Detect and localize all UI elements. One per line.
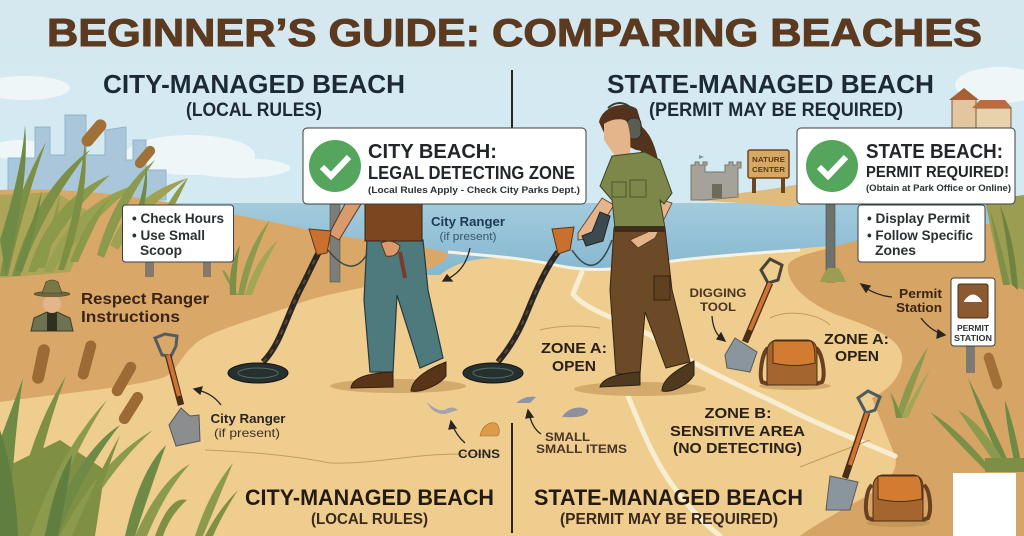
label: permit station: Station — [896, 301, 942, 315]
detector control head — [309, 229, 331, 255]
label: respect ranger instructions — [81, 291, 209, 326]
detector coil — [463, 363, 523, 383]
nature center sign: NATURE — [752, 155, 785, 164]
ranger shadow — [574, 382, 706, 396]
footer label: city-managed beach: (LOCAL RULES) — [311, 511, 428, 528]
state sign post and tuft — [820, 204, 846, 282]
arrow: city ranger upper — [443, 248, 470, 281]
small finds: coins and items — [427, 397, 588, 436]
ranger headset — [608, 103, 641, 139]
right dune grass behind sign — [985, 195, 1024, 290]
label: zone A right: OPEN — [835, 348, 879, 365]
footer label: state-managed beach: (PERMIT MAY BE REQUIRED) — [560, 511, 778, 528]
sign: state beach permit required: STATE BEACH: — [866, 141, 1003, 163]
left upper grass cluster — [0, 125, 188, 278]
sign: state beach permit required: (Obtain at Park Office or Online) — [866, 183, 1011, 193]
label: city ranger upper — [431, 215, 505, 243]
sign: state beach permit required — [797, 128, 1015, 204]
man shadow — [330, 379, 466, 393]
permit station sign: STATION — [954, 334, 992, 343]
label: permit station — [896, 287, 943, 315]
label: zone B — [670, 405, 805, 457]
arrow: digging tool — [712, 316, 725, 341]
label: zone A left: OPEN — [552, 358, 596, 375]
right cattail — [982, 351, 1004, 391]
label: zone A right: ZONE A: — [824, 331, 889, 348]
note: city rules: • Use Small — [132, 227, 205, 243]
left dune — [0, 190, 447, 402]
note: state rules: Zones — [875, 242, 916, 258]
ranger hair — [599, 105, 650, 152]
sign: city beach legal detecting zone — [303, 128, 586, 204]
label: city ranger upper: City Ranger — [431, 215, 505, 229]
sand base — [0, 240, 1024, 536]
permit station sign: PERMIT — [957, 324, 989, 333]
city sign post — [330, 204, 340, 282]
heading: city-managed beach: (LOCAL RULES) — [186, 100, 322, 121]
label: coins: COINS — [458, 447, 500, 461]
zone boundary lines — [573, 272, 895, 536]
label: digging tool — [690, 286, 746, 314]
clouds — [0, 67, 1024, 178]
note: city rules: Scoop — [140, 242, 182, 258]
detector cable — [572, 240, 612, 265]
detector handle — [582, 212, 610, 246]
label: zone A left — [541, 340, 607, 375]
small grass tuft by sign — [222, 220, 278, 295]
sign: city beach legal detecting zone: CITY BEACH: — [368, 140, 497, 163]
arrow: city ranger lower — [194, 387, 221, 405]
city man with metal detector — [228, 204, 466, 393]
detector shaft — [263, 252, 319, 362]
label: city ranger lower — [210, 412, 286, 440]
castle on far hill — [690, 155, 830, 206]
nature center sign — [748, 150, 789, 193]
icon: park ranger — [31, 280, 73, 331]
right dune grass tuft — [890, 347, 930, 418]
man trousers — [364, 240, 443, 372]
label: zone A right — [824, 331, 889, 365]
divider bottom — [511, 423, 513, 533]
footer label: state-managed beach: STATE-MANAGED BEACH — [534, 485, 803, 510]
blank white box — [953, 473, 1016, 536]
label: digging tool: TOOL — [700, 300, 736, 314]
ranger cargo pocket — [654, 276, 670, 300]
ranger face — [604, 119, 630, 156]
sign: state beach permit required: PERMIT REQUIRED! — [866, 164, 1009, 181]
label: small items — [536, 430, 627, 456]
man boots — [351, 372, 393, 388]
shoreline foam — [448, 250, 800, 270]
middle satchel — [759, 340, 831, 390]
label: zone B: SENSITIVE AREA — [670, 423, 805, 440]
note: state rules: • Follow Specific — [867, 227, 973, 243]
detector coil — [228, 363, 288, 383]
detector shaft — [498, 252, 558, 362]
note: state rules — [858, 205, 985, 262]
ranger belt — [614, 226, 665, 232]
lower right grass cluster — [930, 378, 1024, 536]
heading: city-managed beach — [103, 69, 405, 121]
footer label: city-managed beach — [245, 485, 494, 528]
man torso — [365, 204, 422, 241]
label: small items: SMALL — [545, 430, 590, 444]
divider top — [511, 70, 513, 130]
man arm — [329, 204, 361, 240]
label: respect ranger instructions: Instructions — [81, 309, 180, 326]
heading: state-managed beach: (PERMIT MAY BE REQUIRED) — [649, 100, 903, 121]
arrow: permit station up — [861, 284, 892, 297]
ranger shirt pockets — [612, 180, 646, 197]
ranger shirt — [600, 152, 672, 228]
detector cable — [328, 250, 367, 266]
faint sand ripple lines — [205, 313, 870, 467]
label: permit station: Permit — [899, 287, 943, 301]
lower left cattails — [31, 339, 145, 426]
note: city rules: • Check Hours — [132, 210, 224, 226]
arrow: small items — [526, 410, 541, 434]
right dune — [788, 222, 1024, 536]
sign posts under city bullets — [145, 262, 211, 277]
label: respect ranger instructions: Respect Ranger — [81, 291, 209, 308]
label: zone B: (NO DETECTING) — [673, 440, 802, 457]
label: city ranger lower: City Ranger — [210, 412, 286, 426]
ranger trousers — [610, 228, 690, 374]
label: city ranger upper: (if present) — [440, 231, 496, 243]
footer label: state-managed beach — [534, 485, 803, 528]
permit station sign — [951, 278, 995, 373]
left shovel — [155, 334, 200, 446]
label: digging tool: DIGGING — [690, 286, 746, 300]
label: small items: SMALL ITEMS — [536, 442, 627, 456]
right satchel — [866, 475, 930, 527]
label: city ranger lower: (if present) — [214, 426, 280, 440]
man hand — [381, 241, 400, 256]
label: zone A left: ZONE A: — [541, 340, 607, 357]
footer label: city-managed beach: CITY-MANAGED BEACH — [245, 485, 494, 510]
label: zone B: ZONE B: — [704, 405, 772, 422]
ranger station building — [949, 88, 1012, 130]
icon: green check — [309, 140, 361, 192]
water — [0, 203, 1024, 278]
ranger boots — [600, 372, 640, 387]
heading: state-managed beach — [607, 69, 934, 121]
note: state rules: • Display Permit — [867, 210, 970, 226]
heading: state-managed beach: STATE-MANAGED BEACH — [607, 69, 934, 99]
arrow: permit station down — [921, 318, 945, 338]
middle shovel — [725, 259, 782, 372]
heading: city-managed beach: CITY-MANAGED BEACH — [103, 69, 405, 99]
lower left grass cluster — [0, 339, 238, 536]
icon: green check — [806, 140, 858, 192]
city skyline — [8, 115, 166, 200]
ranger arm left — [578, 198, 614, 240]
note: city rules — [122, 205, 234, 262]
detector control head — [552, 227, 574, 254]
ranger arm right — [630, 200, 672, 248]
cattails upper left — [79, 117, 157, 170]
right shovel — [826, 391, 880, 510]
arrow: coins — [449, 421, 465, 443]
nature center sign: CENTER — [752, 165, 786, 174]
female ranger with metal detector — [463, 103, 706, 396]
sign: city beach legal detecting zone: (Local Rules Apply - Check City Parks Dept.) — [368, 185, 580, 196]
sky background — [0, 0, 1024, 210]
man belt strap — [400, 252, 405, 278]
sign: city beach legal detecting zone: LEGAL DETECTING ZONE — [368, 163, 575, 183]
title: BEGINNER’S GUIDE: COMPARING BEACHES — [47, 12, 982, 55]
